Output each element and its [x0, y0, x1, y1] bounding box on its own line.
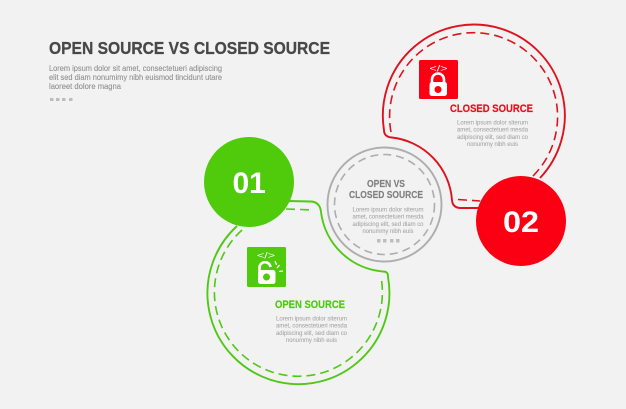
center dots [377, 239, 400, 242]
icon: open lock [247, 247, 286, 287]
center dashed ring [334, 154, 434, 254]
center text: adipiscing elit, sed diam co [352, 221, 424, 228]
title: OPEN SOURCE VS CLOSED SOURCE [49, 38, 330, 58]
open source text: Lorem ipsum dolor siterum [276, 316, 347, 322]
open source text: adipiscing elit, sed diam co [276, 330, 347, 337]
icon: closed lock: </> [430, 64, 448, 74]
intro text block [49, 64, 222, 91]
open source text: amet, consectetueri mesda [276, 322, 347, 330]
center text: amet, consectetueri mesda [352, 214, 424, 220]
open source dashed ring [214, 209, 382, 376]
intro dots [50, 98, 72, 101]
center outer ring [328, 148, 442, 262]
closed source text: amet, consectetueri mesda [457, 126, 528, 134]
closed source text: nonummy nibh euis [467, 141, 519, 148]
closed source text: adipiscing elit, sed diam co [457, 134, 528, 141]
number badge 01 [204, 137, 294, 227]
closed source text: Lorem ipsum dolor siterum [457, 120, 528, 126]
number badge 02 [476, 176, 566, 266]
panel: closed source [383, 25, 566, 266]
panel: open source [204, 137, 389, 384]
center text: nonummy nibh euis [362, 228, 414, 235]
number badge 01: 01 [232, 167, 266, 200]
intro text block: elit sed diam nonumimy nibh euismod tincidunt utare [49, 73, 222, 82]
intro text block: laoreet dolore magna [49, 82, 121, 91]
center heading: OPEN VS [367, 179, 405, 190]
closed source outline [383, 25, 565, 208]
open source text [276, 316, 347, 344]
open source text: nonummy nibh euis [286, 337, 338, 344]
center heading: CLOSED SOURCE [349, 190, 423, 201]
icon: closed lock [419, 60, 458, 99]
closed source dashed ring [390, 33, 558, 201]
panel: center comparison [328, 148, 442, 262]
number badge 02: 02 [503, 206, 539, 239]
closed source text [457, 120, 528, 148]
open source outline [207, 201, 389, 384]
center text [352, 206, 424, 235]
icon: open lock: </> [257, 250, 276, 262]
center heading [349, 179, 423, 201]
open source heading: OPEN SOURCE [275, 299, 345, 311]
center text: Lorem ipsum dolor siterum [352, 206, 424, 214]
intro text block: Lorem ipsum dolor sit amet, consectetueri adipiscing [49, 64, 222, 73]
closed source heading: CLOSED SOURCE [450, 103, 533, 115]
